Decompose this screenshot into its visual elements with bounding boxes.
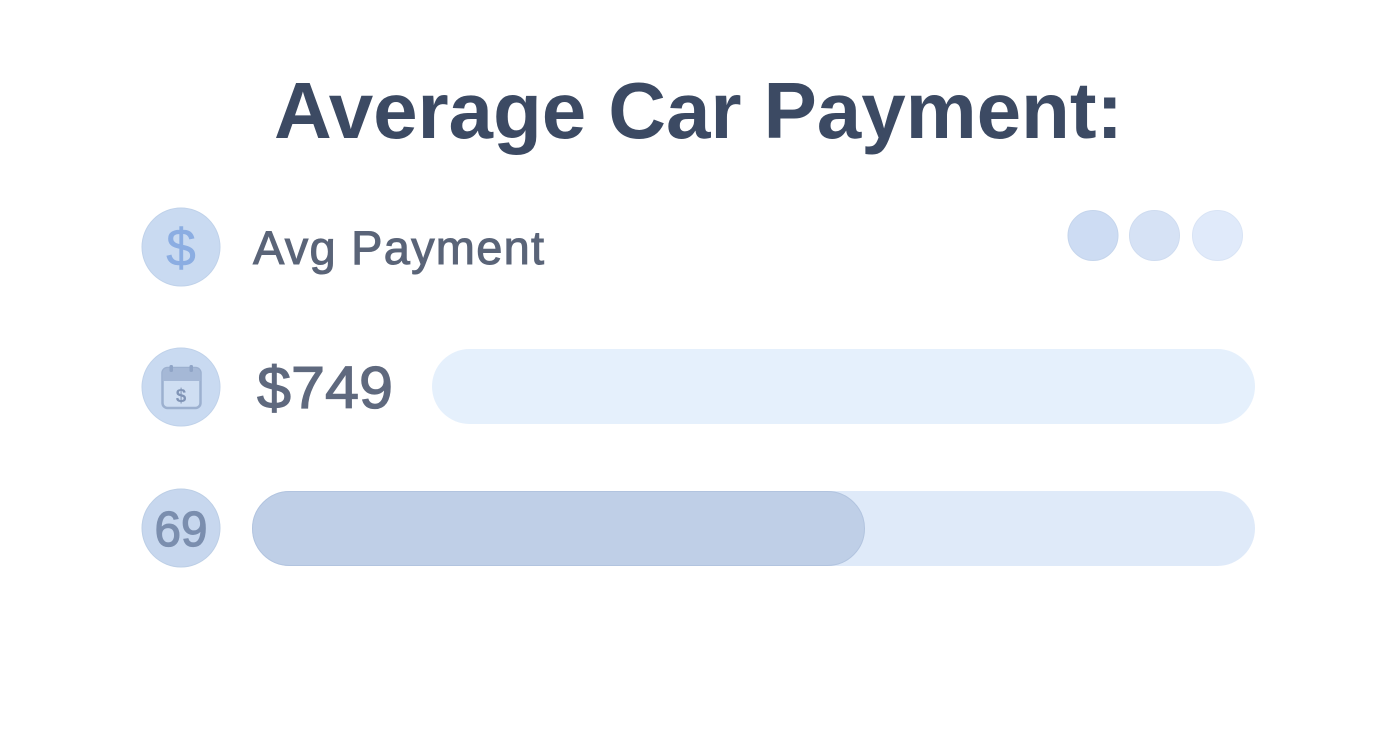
title: Average Car Payment: (274, 66, 1123, 155)
bar: full light track (432, 349, 1255, 424)
icon: dollar sign (142, 208, 220, 286)
icon: number 69: 69 (154, 503, 208, 557)
icon: number 69 (142, 489, 220, 567)
bar: progress track (252, 491, 1255, 566)
icon: calendar with dollar: $ (176, 386, 187, 407)
row 1: average payment label (142, 208, 1242, 286)
row 2: $749 amount (142, 348, 1255, 426)
icon: dollar sign: $ (166, 219, 196, 278)
value: $749: $749 (257, 355, 393, 421)
label: Avg Payment: Avg Payment (253, 221, 544, 274)
bar: progress fill (252, 492, 864, 566)
row 3: 69 months (142, 489, 1255, 567)
three indicator dots (1068, 210, 1242, 260)
icon: calendar with dollar (142, 348, 220, 426)
